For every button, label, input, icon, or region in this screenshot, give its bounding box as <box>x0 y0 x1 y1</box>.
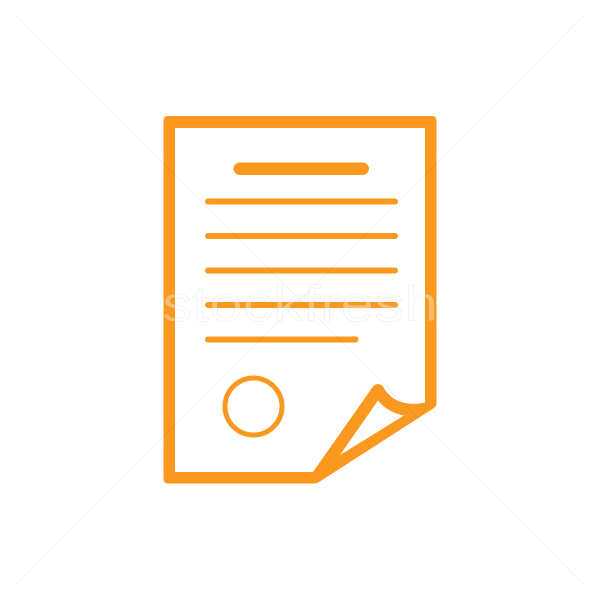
text line 4 <box>205 302 398 308</box>
text line 5 <box>205 336 358 342</box>
fold interior <box>340 400 404 455</box>
icon: document sheet <box>164 116 436 484</box>
title bar <box>234 162 369 175</box>
sheet silhouette <box>164 116 436 484</box>
text line 3 <box>205 268 398 274</box>
seal circle <box>225 378 282 435</box>
text line 2 <box>205 233 398 239</box>
watermark text: stockfresh <box>162 276 438 332</box>
page interior <box>175 128 425 472</box>
text line 1 <box>205 198 398 204</box>
